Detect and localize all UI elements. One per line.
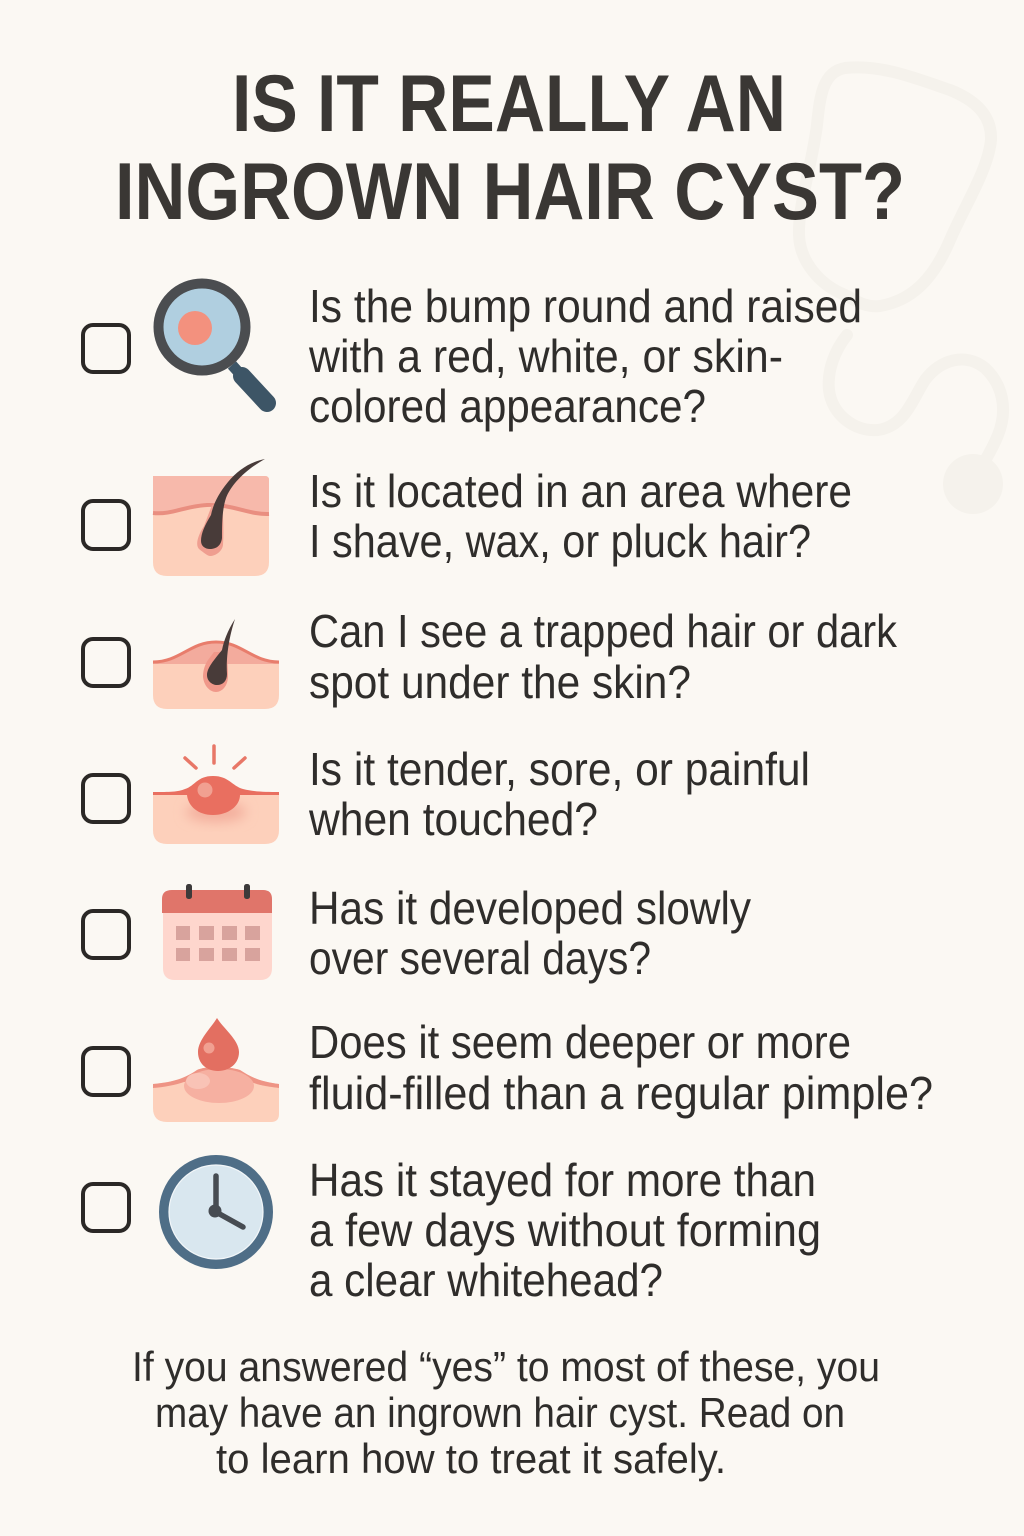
- icon: clock: [164, 1160, 268, 1264]
- question 5 text: [309, 882, 751, 984]
- question 2 text: Is it located in an area where: [309, 465, 852, 517]
- checkbox 1: [83, 325, 129, 372]
- question 7 text: a few days without forming: [309, 1204, 821, 1256]
- question 1 text: Is the bump round and raised: [309, 280, 862, 332]
- question 5 text: over several days?: [309, 932, 651, 984]
- checkbox 5: [83, 911, 129, 958]
- question 2 text: I shave, wax, or pluck hair?: [309, 515, 811, 567]
- closing note: If you answered “yes” to most of these, you: [132, 1343, 880, 1390]
- question 6 text: fluid-filled than a regular pimple?: [309, 1067, 933, 1119]
- checklist item 2: [83, 459, 852, 576]
- checkbox 7: [83, 1184, 129, 1231]
- title: INGROWN HAIR CYST?: [115, 147, 905, 237]
- checkbox 4: [83, 775, 129, 822]
- icon: calendar: [162, 884, 272, 980]
- checkbox 2: [83, 501, 129, 549]
- checklist item 6: [83, 1016, 933, 1122]
- icon: hair follicle in skin: [153, 459, 269, 576]
- question 4 text: when touched?: [308, 793, 598, 845]
- icon: trapped hair under skin: [153, 619, 279, 709]
- question 7 text: a clear whitehead?: [309, 1254, 663, 1306]
- question 6 text: [309, 1016, 933, 1119]
- watermark: stethoscope: [799, 67, 1003, 514]
- question 1 text: [308, 280, 862, 432]
- question 4 text: [308, 743, 810, 845]
- question 3 text: spot under the skin?: [309, 656, 691, 708]
- question 2 text: [309, 465, 852, 567]
- question 3 text: Can I see a trapped hair or dark: [309, 605, 898, 657]
- checkbox 3: [83, 639, 129, 686]
- icon: tender bump: [153, 746, 279, 844]
- icon: magnifying glass: [158, 284, 267, 403]
- question 6 text: Does it seem deeper or more: [309, 1016, 851, 1068]
- checklist item 4: [83, 743, 810, 845]
- question 3 text: [309, 605, 898, 708]
- checklist item 5: [83, 882, 751, 984]
- closing note: [132, 1343, 880, 1482]
- checkbox 6: [83, 1048, 129, 1095]
- closing note: to learn how to treat it safely.: [216, 1435, 726, 1482]
- icon: fluid-filled bump with drop: [153, 1018, 279, 1122]
- title: [115, 59, 905, 237]
- title: IS IT REALLY AN: [232, 59, 786, 149]
- checklist item 3: [83, 605, 898, 709]
- question 4 text: Is it tender, sore, or painful: [309, 743, 810, 795]
- question 1 text: with a red, white, or skin-: [308, 330, 783, 382]
- question 7 text: Has it stayed for more than: [309, 1154, 816, 1206]
- closing note: may have an ingrown hair cyst. Read on: [155, 1389, 845, 1436]
- question 1 text: colored appearance?: [309, 380, 706, 432]
- checklist item 7: [83, 1154, 821, 1306]
- question 7 text: [309, 1154, 821, 1306]
- question 5 text: Has it developed slowly: [309, 882, 751, 934]
- checklist item 1: [83, 280, 862, 432]
